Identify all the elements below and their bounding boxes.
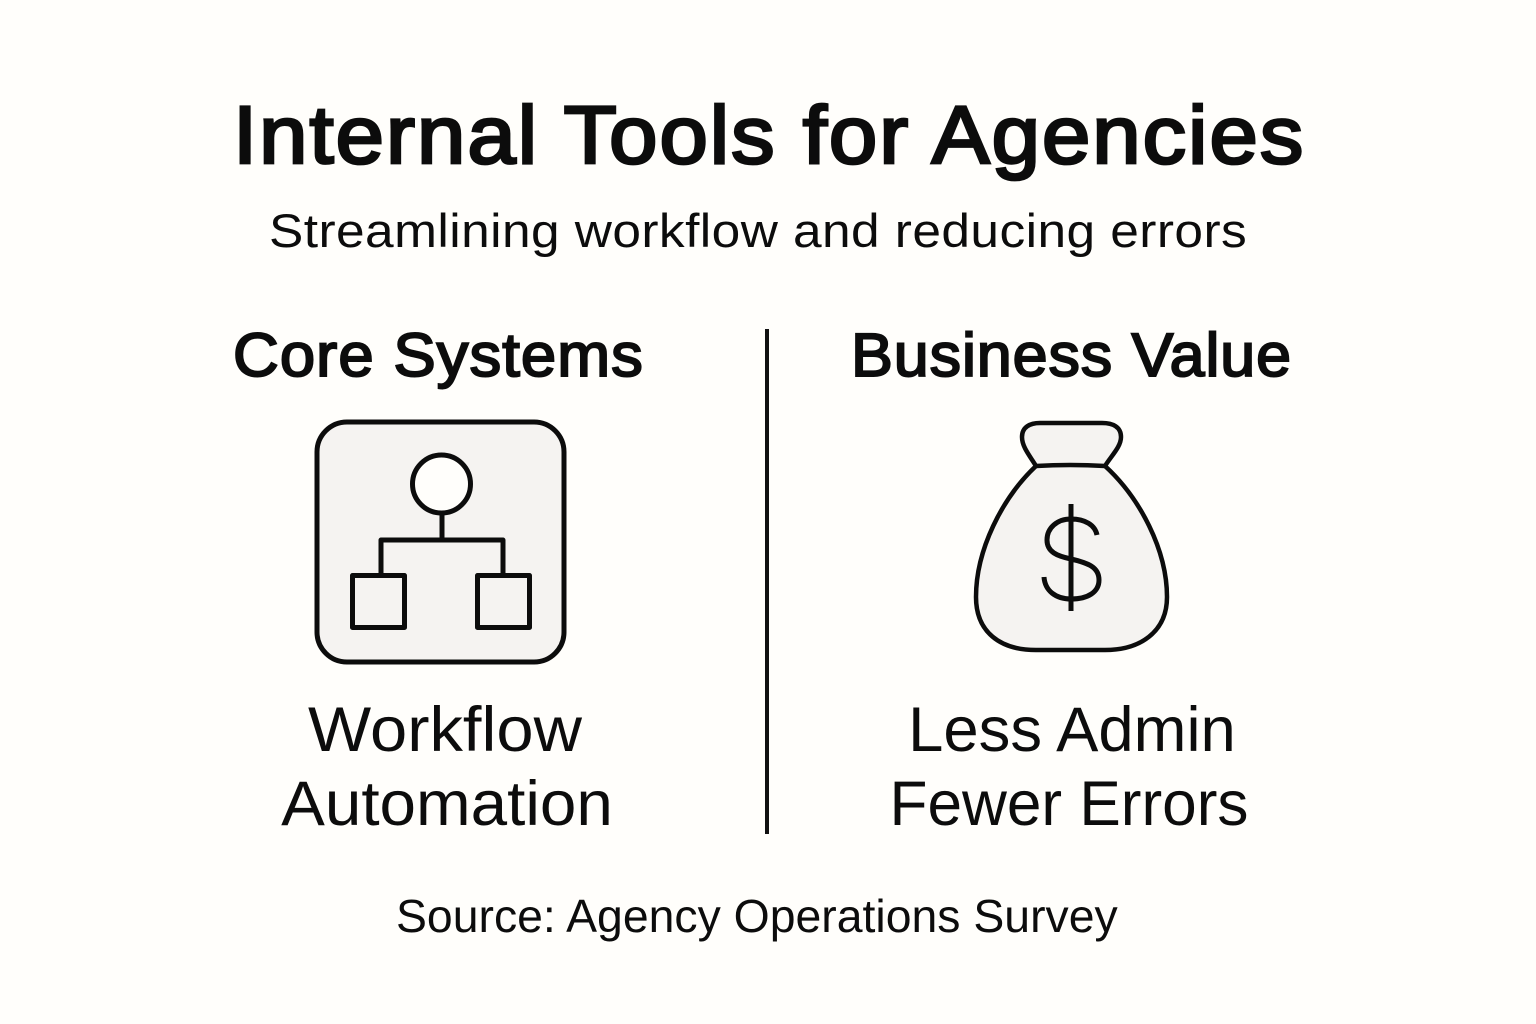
heading: core systems: Core Systems <box>233 321 644 389</box>
subtitle: Streamlining workflow and reducing errors <box>269 204 1247 257</box>
icon: money bag <box>974 420 1170 652</box>
text: less admin fewer errors: Fewer Errors <box>890 769 1248 839</box>
text: less admin fewer errors: Less Admin <box>908 695 1236 765</box>
text: workflow automation: Automation <box>281 769 613 839</box>
source note: Source: Agency Operations Survey <box>396 890 1118 942</box>
heading: business value: Business Value <box>851 321 1292 389</box>
icon: workflow hierarchy <box>314 420 566 664</box>
text: workflow automation <box>281 695 613 839</box>
title: Internal Tools for Agencies <box>233 90 1305 181</box>
divider line <box>765 329 769 834</box>
text: less admin fewer errors <box>890 695 1248 839</box>
text: workflow automation: Workflow <box>308 695 582 765</box>
